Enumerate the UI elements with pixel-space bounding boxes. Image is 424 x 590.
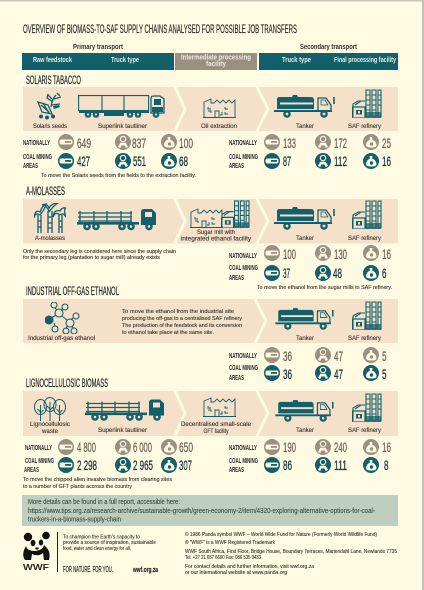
stats: primary: AREAS	[24, 467, 39, 474]
stats: primary: 837	[132, 136, 146, 151]
footer: legal: ® “WWF” is a WWF Registered Trademark	[185, 539, 275, 546]
panel: Tanker	[296, 123, 315, 130]
footer: mission: food, water and clean energy for all.	[63, 546, 131, 552]
footer: legal	[185, 531, 397, 576]
stats: secondary: AREAS	[229, 275, 244, 282]
stats: primary	[23, 134, 193, 170]
stats: secondary: COAL MINING	[229, 265, 258, 272]
panel: Oil extraction	[201, 123, 237, 130]
stats: secondary: 16	[382, 440, 391, 455]
note: To move the Solaris seeds from the fields to the extraction facility.	[41, 173, 196, 179]
stats: secondary: COAL MINING	[229, 365, 258, 372]
panel: more details link: More details can be found in a full report, accessible here:	[28, 497, 180, 506]
stats: secondary: 133	[283, 136, 296, 151]
panel: producing the off-gas to a centralised SAF refinery	[122, 316, 242, 322]
stats: secondary: 100	[283, 247, 296, 262]
stats: secondary: 25	[382, 136, 391, 151]
header bar: intermediate: facility	[206, 61, 226, 68]
panel: more details link	[22, 495, 398, 526]
stats: primary: 2 965	[133, 458, 153, 473]
panel: SAF refinery	[348, 335, 382, 342]
stats: primary: 307	[179, 458, 192, 473]
note	[23, 477, 172, 490]
stats: secondary	[229, 134, 391, 170]
section: A-molasses	[23, 186, 398, 291]
stats: secondary: 190	[283, 440, 296, 455]
header bar: primary	[22, 53, 174, 70]
stats: secondary: 36	[283, 367, 292, 382]
heading: INDUSTRIAL OFF-GAS ETHANOL	[26, 286, 119, 298]
heading: A-MOLASSES	[26, 186, 65, 198]
logo: WWF panda: WWF	[23, 562, 49, 572]
panel: Tanker	[296, 427, 315, 434]
stats: secondary: NATIONALLY	[229, 140, 257, 147]
stats: primary: 649	[77, 136, 91, 151]
stats: primary: 68	[179, 154, 188, 169]
stats: secondary: 36	[283, 349, 292, 364]
panel	[23, 199, 398, 244]
footer: legal: Tel. +27 21 657 6600 Fax: 086 535 9433	[185, 555, 261, 561]
panel: SAF refinery	[348, 427, 382, 434]
panel: Sugar mill with	[197, 229, 235, 236]
note: to a number of GFT plants accross the country	[23, 484, 132, 490]
stats: secondary: 5	[382, 367, 386, 382]
stats: secondary: 37	[283, 266, 290, 281]
panel: To move the ethanol from the industrial site	[122, 309, 234, 315]
stats: secondary: 47	[334, 349, 343, 364]
table header	[22, 44, 398, 70]
stats: primary: 6 000	[133, 440, 152, 455]
panel: more details link: truckers-in-a-biomass-supply-chain	[28, 514, 121, 524]
stats: secondary: 5	[382, 349, 386, 364]
stats: primary: 4 800	[77, 440, 96, 455]
stats: secondary: 172	[334, 136, 347, 151]
stats: secondary: 112	[334, 154, 347, 169]
stats: secondary: 8	[384, 458, 388, 473]
panel: A-molasses	[35, 235, 66, 242]
note: primary leg	[23, 249, 176, 261]
header bar: secondary	[259, 53, 398, 70]
panel: Solaris seeds	[33, 123, 68, 130]
note: ethanol: To move the ethanol from the sugar mills to SAF refinery.	[257, 285, 392, 291]
heading: SOLARIS TABACCO	[26, 75, 81, 87]
stats: secondary: COAL MINING	[229, 154, 258, 161]
footer: legal: For contact details and further information, visit wwf.org.za	[185, 564, 314, 570]
footer: mission: provide a source of inspiration, sustainable	[63, 540, 156, 546]
panel: Lignocellulosic	[30, 421, 71, 428]
header bar: secondary: Final processing facility	[334, 57, 396, 64]
panel: The production of the feedstock and its conversion	[122, 323, 242, 329]
logo: WWF panda	[23, 532, 50, 572]
stats: secondary: 87	[283, 154, 291, 169]
section: Solaris tabacco	[23, 75, 398, 179]
stats: primary: AREAS	[23, 163, 38, 170]
stats: primary: 427	[77, 154, 90, 169]
stats: secondary: AREAS	[229, 467, 244, 474]
stats: secondary: 16	[382, 154, 391, 169]
stats: secondary: NATIONALLY	[229, 353, 257, 360]
footer: tagline: FOR NATURE. FOR YOU.	[63, 565, 113, 574]
panel: to ethanol take place at the same site.	[122, 330, 214, 336]
panel	[23, 87, 398, 131]
note: To move the chipped alien invasive biomass from clearing sites	[23, 477, 172, 483]
stats: primary: COAL MINING	[23, 154, 52, 161]
stats: secondary: 111	[334, 458, 347, 473]
stats: primary: NATIONALLY	[23, 140, 50, 147]
header bar: intermediate	[175, 53, 257, 70]
panel: waste	[41, 428, 58, 435]
header bar: intermediate: Intermediate processing	[181, 54, 251, 62]
panel: Tanker	[296, 335, 315, 342]
heading: secondary transport: Secondary transport	[300, 44, 358, 51]
stats: secondary: 16	[382, 247, 391, 262]
panel: Decentralised small-scale	[181, 421, 251, 428]
stats: secondary: 130	[334, 247, 347, 262]
footer: legal: or our international website at www.panda.org	[185, 570, 287, 576]
heading: LIGNOCELLULOSIC BIOMASS	[26, 378, 108, 390]
stats: primary: 650	[179, 440, 193, 455]
footer: legal: © 1986 Panda symbol WWF – World Wide Fund for Nature (Formerly World Wildlife Fund)	[185, 531, 377, 538]
stats: primary: 2 298	[77, 458, 97, 473]
note: primary leg: Only the secondary leg is considered here since the supply chain	[23, 249, 176, 255]
panel: Superlink tautliner	[98, 427, 148, 434]
panel	[23, 299, 398, 343]
stats: primary: NATIONALLY	[25, 445, 52, 452]
footer: mission: To champion the Earth's capacity to	[63, 534, 140, 540]
section: Lignocellulosic biomass	[23, 378, 398, 490]
panel	[23, 391, 398, 436]
stats: primary	[24, 439, 193, 474]
stats: secondary: 86	[283, 458, 292, 473]
header bar: primary: Raw feedstock	[33, 57, 72, 64]
stats: secondary: AREAS	[229, 163, 244, 170]
header bar: primary: Truck type	[111, 57, 139, 64]
stats: secondary: 48	[333, 266, 342, 281]
header bar: secondary: Truck type	[282, 57, 311, 64]
stats: secondary: NATIONALLY	[229, 253, 257, 260]
panel: Superlink tautliner	[98, 123, 148, 130]
stats: secondary	[229, 245, 391, 282]
stats: secondary: AREAS	[229, 375, 244, 382]
panel: integrated ethanol facility	[181, 236, 252, 242]
footer: mission	[63, 534, 156, 552]
panel: GFT facility	[204, 428, 229, 435]
stats: secondary	[229, 439, 391, 474]
footer: legal: WWF South Africa, First Floor, Bridge House, Boundary Terraces, Mariendahl Lane, Newlands 7735	[185, 549, 397, 555]
stats: primary: 551	[133, 154, 146, 169]
panel: SAF refinery	[348, 123, 382, 130]
heading: primary transport: Primary transport	[73, 44, 124, 51]
panel: SAF refinery	[348, 235, 382, 242]
note: primary leg: for the primary leg (plantation to sugar mill) already exists	[23, 255, 160, 261]
panel: Tanker	[296, 235, 315, 242]
section: Industrial off-gas ethanol	[23, 286, 398, 382]
stats: secondary: 240	[334, 440, 347, 455]
stats: primary: 100	[179, 136, 193, 151]
stats: secondary: 6	[382, 266, 386, 281]
footer: website: wwf.org.za	[132, 565, 159, 574]
stats: secondary: NATIONALLY	[229, 445, 257, 452]
stats: secondary: COAL MINING	[229, 458, 258, 465]
stats: secondary: 47	[334, 367, 343, 382]
stats: secondary	[229, 347, 386, 382]
panel: Industrial off-gas ethanol	[28, 335, 95, 342]
stats: primary: COAL MINING	[25, 458, 54, 465]
